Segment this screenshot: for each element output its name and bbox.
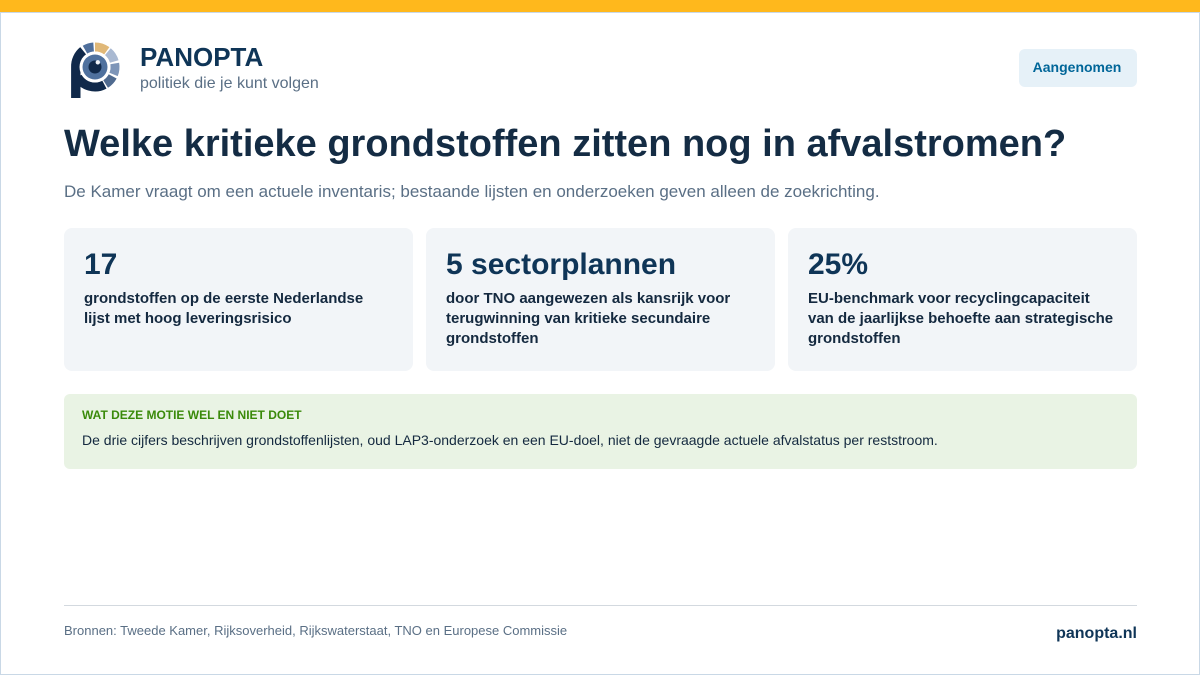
panel: stat 25% [788,228,1137,371]
stat description: van de jaarlijkse behoefte aan strategische [808,310,1113,327]
subtitle: De Kamer vraagt om een actuele inventaris; bestaande lijsten en onderzoeken geven alleen de zoekrichting. [64,182,880,201]
callout text: De drie cijfers beschrijven grondstoffenlijsten, oud LAP3-onderzoek en een EU-doel, niet de gevraagde actuele afvalstatus per reststroom. [82,432,938,448]
stat number: 17 [84,248,117,281]
stat description [84,290,363,327]
icon: Panopta logo [71,42,120,98]
stat number: 5 sectorplannen [446,248,676,281]
stat description: grondstoffen [808,330,900,347]
callout: wat deze motie wel en niet doet [64,394,1137,469]
stat description: door TNO aangewezen als kansrijk voor [446,290,730,307]
callout heading: WAT DEZE MOTIE WEL EN NIET DOET [82,408,302,422]
stat description: grondstoffen [446,330,538,347]
panel: stat 5 sectorplannen [426,228,775,371]
footer brand: panopta.nl [1056,625,1137,642]
stat number: 25% [808,248,868,281]
stat description [808,290,1113,347]
stat description: lijst met hoog leveringsrisico [84,310,292,327]
stat description [446,290,730,347]
panel: stat 17 [64,228,413,371]
stat description: grondstoffen op de eerste Nederlandse [84,290,363,307]
top accent bar [0,0,1200,12]
stat description: terugwinning van kritieke secundaire [446,310,710,327]
footer divider [64,605,1137,606]
status badge: Aangenomen [1033,59,1121,75]
brand name: PANOPTA [140,42,263,72]
sources: Bronnen: Tweede Kamer, Rijksoverheid, Rijkswaterstaat, TNO en Europese Commissie [64,623,567,638]
title: Welke kritieke grondstoffen zitten nog in afvalstromen? [64,123,1066,165]
status badge [1019,49,1137,87]
tagline: politiek die je kunt volgen [140,75,319,92]
stat description: EU-benchmark voor recyclingcapaciteit [808,290,1090,307]
